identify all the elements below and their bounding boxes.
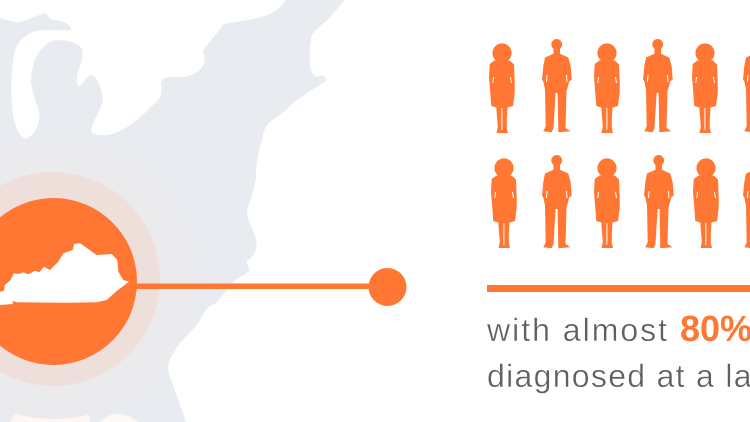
icon: woman <box>693 158 719 248</box>
icon: man <box>542 155 572 248</box>
icon: woman <box>594 158 620 248</box>
icon: man <box>643 39 673 132</box>
orange circle <box>0 198 137 365</box>
icon: woman <box>594 43 620 133</box>
statistic text <box>486 308 750 394</box>
divider bar <box>487 285 750 292</box>
icon: man <box>743 39 750 132</box>
icon: woman <box>491 158 517 248</box>
connector line <box>135 284 375 289</box>
map of the eastern United States <box>0 0 345 422</box>
icon: man <box>743 155 750 248</box>
middle halo ring <box>0 172 160 386</box>
lower white water shapes <box>10 410 138 422</box>
text line 2: diagnosed at a la <box>487 358 750 394</box>
highlight circle with rings <box>0 137 195 419</box>
connector end dot <box>368 268 406 306</box>
people pictogram, two rows <box>489 39 750 248</box>
icon: woman <box>692 43 718 133</box>
icon: man <box>542 39 572 132</box>
icon: Kentucky silhouette <box>0 243 129 305</box>
icon: woman <box>489 43 515 133</box>
text line 1: with almost 80% <box>486 308 750 349</box>
outer halo ring <box>0 137 195 419</box>
icon: man <box>644 155 674 248</box>
